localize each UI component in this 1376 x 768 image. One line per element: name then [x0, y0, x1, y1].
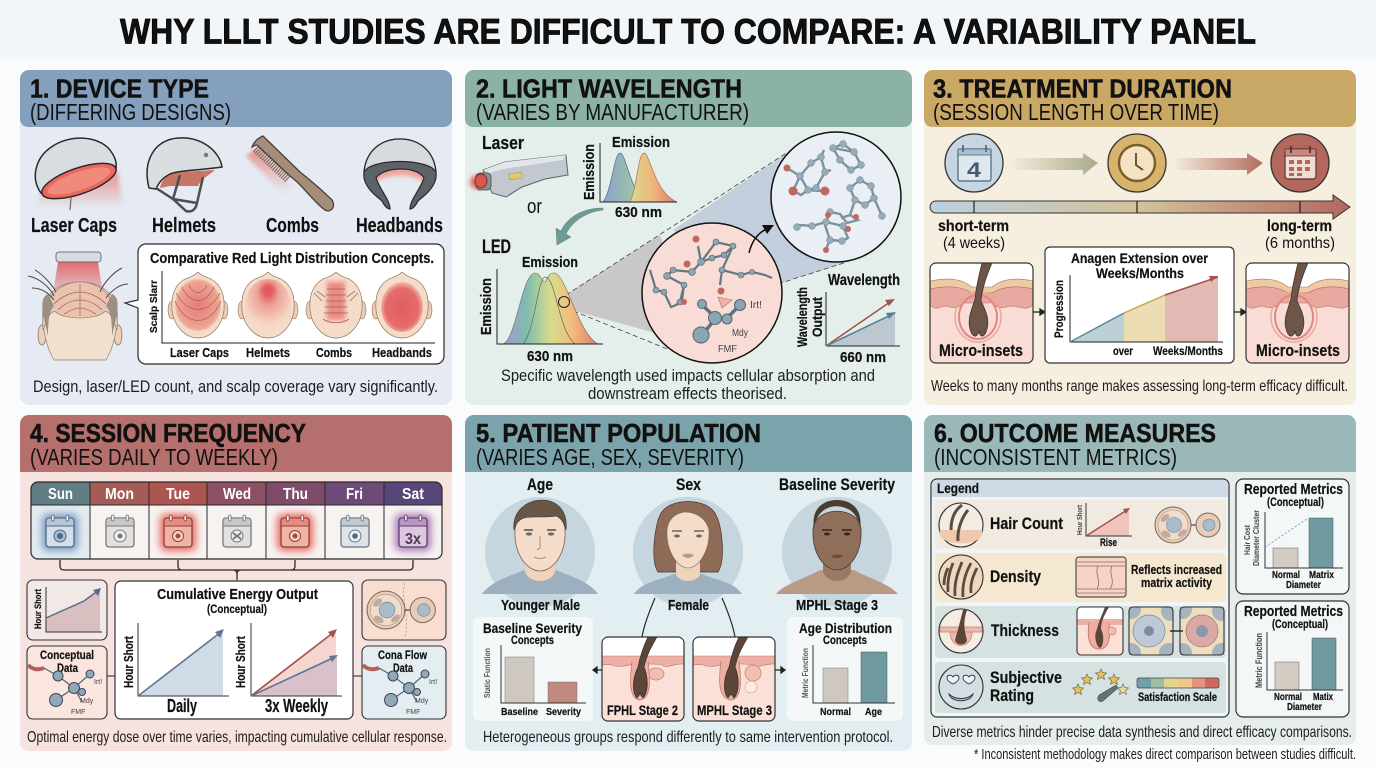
row note line 2: matrix activity — [1141, 575, 1213, 590]
x label: Normal — [820, 706, 851, 718]
label: sex: Sex — [676, 475, 701, 494]
icon: saturday calendar 3x — [395, 514, 431, 551]
chart: laser emission — [582, 135, 677, 221]
chart subtitle: (Conceptual) — [1267, 495, 1324, 509]
label: MPHL stage 3: MPHL Stage 3 — [796, 598, 878, 614]
axis label: Scalp Slarr — [148, 280, 160, 333]
chart title: Wavelength — [828, 272, 900, 289]
molecule — [28, 665, 94, 706]
day labels: Fri — [346, 486, 363, 503]
subheading: (VARIES DAILY TO WEEKLY) — [30, 444, 278, 470]
icon: friday calendar — [341, 515, 369, 547]
mini chart: hour chart — [27, 580, 107, 640]
y-axis label: Output — [810, 297, 825, 337]
x label: Matix — [1313, 691, 1333, 703]
magnified molecule circle — [642, 223, 782, 363]
chart title: Baseline Severity — [483, 620, 582, 636]
timeline arrow — [930, 195, 1350, 219]
label: 6 months: (6 months) — [1265, 235, 1335, 252]
day labels: Tue — [166, 486, 190, 503]
day labels: Mon — [105, 486, 134, 503]
caption: downstream effects theorised. — [588, 385, 787, 403]
row label: Density — [990, 567, 1041, 586]
x-axis value: 630 nm — [527, 348, 573, 365]
inset: FPHL stage 2 — [602, 637, 684, 721]
icon: calendar month — [1271, 134, 1329, 192]
chart title: Emission — [522, 255, 578, 271]
icon: comb — [246, 136, 333, 211]
heading: 6. OUTCOME MEASURES — [934, 418, 1216, 448]
icon: saturday calendar 3x: 3x — [405, 531, 421, 548]
chart subtitle: (Conceptual) — [207, 602, 267, 616]
label: long-term: long-term — [1267, 218, 1332, 235]
x label: over — [1113, 344, 1133, 358]
subheading: (VARIES AGE, SEX, SEVERITY) — [476, 444, 744, 470]
row label: Hair Count — [990, 514, 1063, 533]
icon: laser device — [470, 155, 568, 197]
icon: calendar 4 — [945, 134, 1003, 192]
row note: Reflects increased — [1131, 562, 1222, 577]
chart: cumulative energy output — [115, 581, 353, 719]
sub-chart: daily — [121, 623, 229, 716]
caption — [501, 367, 875, 403]
connector curves — [642, 598, 735, 637]
chart title: Age Distribution — [799, 620, 892, 636]
heading: 3. TREATMENT DURATION — [933, 74, 1232, 104]
icon: laser cap — [35, 138, 122, 210]
small label: FMF — [71, 709, 85, 716]
chart title: Reported Metrics — [1244, 603, 1343, 620]
inset label: MPHL Stage 3 — [697, 702, 772, 718]
chart title: Reported Metrics — [1244, 481, 1343, 498]
label: baseline severity: Baseline Severity — [779, 475, 895, 494]
label: helmets: Helmets — [246, 346, 290, 360]
arrow: short to mid — [1010, 153, 1098, 175]
inset: follicle late — [1246, 263, 1349, 363]
label: headbands: Headbands — [356, 215, 443, 237]
x label: Diameter — [1286, 579, 1321, 591]
molecule — [363, 665, 429, 706]
day labels: Thu — [283, 486, 308, 503]
illustration: red light over back of head — [28, 252, 128, 360]
data box: cona flow data — [362, 646, 446, 719]
x label: Normal — [1274, 691, 1302, 703]
y-axis label: Hour Short — [121, 635, 136, 688]
heading: 5. PATIENT POPULATION — [476, 418, 761, 448]
connector — [107, 675, 115, 677]
caption: Heterogeneous groups respond differently to same intervention protocol. — [483, 729, 893, 746]
label: LED: LED — [482, 237, 511, 258]
label: helmets: Helmets — [152, 215, 216, 237]
chart subtitle: (Conceptual) — [1272, 617, 1328, 631]
y-axis label: Emission — [582, 144, 598, 200]
arrow — [1033, 309, 1045, 315]
y-axis label: Static Function — [483, 648, 492, 698]
inset label: Micro-insets — [939, 341, 1023, 360]
cone: magnification to molecular view — [564, 152, 847, 350]
box title: Cona Flow — [378, 648, 428, 662]
panel: outcome measures — [924, 415, 1356, 745]
chart subtitle: Concepts — [823, 633, 867, 647]
y-axis label: Metric Function — [1254, 633, 1264, 688]
x label: 3x Weekly — [265, 696, 328, 716]
legend row: hair count — [935, 500, 1226, 549]
icon: headband — [364, 139, 436, 209]
caption: Design, laser/LED count, and scalp coverage vary significantly. — [33, 377, 438, 396]
panel: device type — [20, 70, 452, 405]
magnified molecule circle upper — [771, 132, 901, 262]
label: laser caps: Laser Caps — [31, 215, 117, 237]
y-axis label: Wavelength — [795, 287, 810, 347]
heading: 4. SESSION FREQUENCY — [30, 418, 306, 448]
small label: FMF — [406, 709, 420, 716]
arrow: to upper molecule view — [749, 225, 774, 253]
weekly calendar strip — [31, 482, 442, 559]
head map: headbands — [372, 272, 432, 338]
subheading: differing designs: (DIFFERING DESIGNS) — [30, 99, 231, 125]
sub-chart: 3x weekly — [233, 623, 342, 716]
small label: Irt! — [94, 679, 102, 686]
chart: anagen extension — [1045, 247, 1234, 363]
x label: Normal — [1272, 569, 1300, 581]
bracket connecting days to chart — [60, 560, 413, 580]
label: Mdy: Mdy — [732, 328, 748, 339]
label: female: Female — [668, 598, 709, 614]
icon: thursday calendar — [277, 514, 313, 551]
title band — [0, 0, 1376, 57]
icon: stars and comet — [1072, 669, 1128, 702]
subheading: (SESSION LENGTH OVER TIME) — [933, 99, 1219, 125]
chart: age distribution concepts — [787, 617, 903, 721]
icon: clock — [1108, 134, 1166, 192]
arrow: mid to long — [1175, 153, 1263, 175]
chart: reported metrics bottom — [1236, 601, 1349, 717]
icon: monday calendar — [106, 515, 134, 547]
chart axes — [162, 271, 435, 343]
label: or: or — [527, 196, 542, 218]
head map: helmets — [238, 272, 298, 338]
y-axis label: Metric Function — [801, 648, 810, 698]
y-axis label: Emission — [479, 278, 495, 335]
chart: wavelength output — [795, 272, 900, 366]
panel: treatment duration — [924, 70, 1356, 405]
small label: Irt! — [429, 679, 437, 686]
panel: light wavelength — [465, 70, 912, 405]
connector — [353, 675, 362, 677]
callout title: Comparative Red Light Distribution Concepts. — [150, 251, 434, 267]
legend title: Legend — [937, 480, 979, 496]
icon: tuesday calendar — [160, 514, 196, 551]
arrow — [593, 667, 602, 673]
inset: follicle early — [930, 263, 1033, 363]
label: younger male: Younger Male — [501, 598, 580, 614]
icon: helmet — [147, 138, 222, 211]
chart title: Anagen Extension over — [1071, 250, 1208, 266]
callout: comparative red light distribution — [125, 244, 444, 364]
head map: combs — [306, 272, 366, 338]
y-axis label: Hour Short — [1075, 505, 1084, 535]
x-axis value: 660 nm — [840, 349, 886, 366]
chart title: Cumulative Energy Output — [157, 586, 318, 603]
label: laser: Laser — [482, 133, 524, 153]
x label: Weeks/Months — [1153, 344, 1223, 358]
y-axis label: Hour Short — [33, 588, 44, 629]
portrait: MPHL stage 3 — [776, 497, 898, 607]
inset label: FPHL Stage 2 — [607, 702, 678, 718]
satisfaction scale — [1137, 678, 1219, 704]
calendar number: 4 — [967, 159, 981, 182]
label: 4 weeks: (4 weeks) — [943, 235, 1005, 252]
label: combs: Combs — [266, 215, 319, 237]
inset label: Micro-insets — [1256, 341, 1340, 360]
arrow: laser to LED — [556, 208, 603, 245]
legend row: subjective rating — [935, 662, 1226, 713]
label: combs: Combs — [316, 346, 352, 360]
label: age: Age — [527, 475, 553, 494]
label: headbands: Headbands — [372, 346, 432, 360]
head map: laser caps — [168, 272, 228, 338]
label: FMF: FMF — [718, 344, 737, 355]
x label: Rise — [1100, 537, 1117, 549]
x label: Baseline — [501, 706, 538, 718]
y-axis label: Progression — [1052, 280, 1066, 338]
arrow — [775, 667, 785, 673]
chart: LED emission — [479, 255, 603, 365]
label: laser caps: Laser Caps — [170, 346, 229, 360]
day labels — [48, 486, 425, 503]
day labels: Sun — [48, 486, 73, 503]
small label: Mdy — [80, 698, 94, 705]
x-axis value: 630 nm — [615, 204, 662, 221]
portrait: younger male — [482, 497, 598, 607]
panel: patient population — [465, 415, 912, 751]
inset: MPHL stage 3 — [693, 637, 775, 721]
cell illustration — [1155, 507, 1220, 543]
subheading: (VARIES BY MANUFACTURER) — [476, 99, 749, 125]
data box: conceptual data — [27, 646, 107, 719]
legend row: thickness — [935, 599, 1232, 663]
scale label: Satisfaction Scale — [1138, 692, 1217, 704]
x label: Age — [865, 706, 882, 718]
legend row: density — [935, 553, 1226, 602]
y-axis label: Hair Cost — [1242, 525, 1252, 555]
row label line 2: Rating — [990, 686, 1034, 705]
x label: Matrix — [1309, 569, 1334, 581]
x label: Diameter — [1287, 701, 1322, 713]
chart subtitle: Concepts — [511, 633, 554, 647]
x label: Severity — [546, 706, 581, 718]
small label: Mdy — [415, 698, 429, 705]
panel: session frequency — [20, 415, 452, 751]
icon: wednesday calendar — [223, 515, 251, 547]
y-axis label: Diameter Cluster — [1251, 509, 1261, 566]
arrow — [1234, 309, 1246, 315]
subheading: (INCONSISTENT METRICS) — [934, 444, 1177, 470]
heading: device type: 1. DEVICE TYPE — [30, 74, 209, 104]
day labels: Wed — [223, 486, 251, 503]
caption: Specific wavelength used impacts cellular absorption and — [501, 367, 875, 385]
box title line 2: Data — [57, 661, 78, 675]
caption: Optimal energy dose over time varies, impacting cumulative cellular response. — [27, 729, 447, 746]
heading: light wavelength: 2. LIGHT WAVELENGTH — [476, 74, 742, 104]
row label: Subjective — [990, 668, 1062, 687]
box title line 2: Data — [393, 661, 413, 675]
portrait: female — [633, 497, 743, 607]
icon: sunday calendar — [42, 514, 78, 551]
label: Irt!: Irt! — [750, 300, 762, 311]
row label: Thickness — [991, 621, 1059, 640]
x label: Daily — [167, 696, 197, 716]
label: short-term: short-term — [938, 218, 1009, 235]
y-axis label: Hour Short — [233, 635, 248, 688]
chart title: Emission — [612, 135, 670, 151]
legend panel — [931, 479, 1232, 717]
chart title line 2: Weeks/Months — [1096, 265, 1184, 281]
cell pair box — [362, 580, 446, 640]
title: WHY LLLT STUDIES ARE DIFFICULT TO COMPARE: A VARIABILITY PANEL — [120, 12, 1256, 52]
day labels: Sat — [402, 486, 425, 503]
box title: Conceptual — [40, 648, 94, 662]
chart: reported metrics top — [1236, 479, 1349, 594]
chart: baseline severity concepts — [473, 617, 593, 721]
